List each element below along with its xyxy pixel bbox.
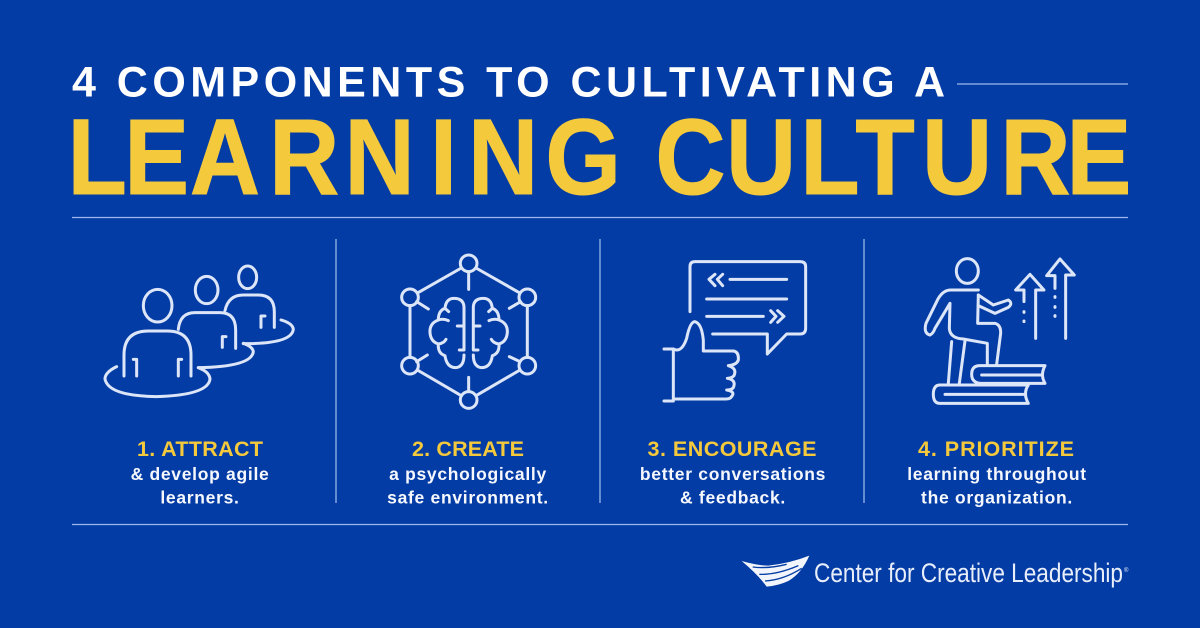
icon: person climbing books with arrows: [925, 259, 1074, 403]
text: encourage description: better conversations: [640, 464, 826, 484]
text: attract description: learners.: [160, 488, 240, 508]
heading: prioritize: 4. PRIORITIZE: [918, 437, 1074, 461]
text: attract description: & develop agile: [131, 464, 269, 484]
title line 2: LEARNING CULTURE: [68, 96, 1131, 217]
panel: encourage: [640, 262, 826, 508]
text: prioritize description: learning throughout: [907, 464, 1087, 484]
title line 1: 4 COMPONENTS TO CULTIVATING A: [72, 58, 945, 106]
text: encourage description: & feedback.: [680, 488, 786, 508]
text: create description: safe environment.: [387, 488, 549, 508]
icon: brain in hexagon network: [402, 255, 536, 408]
icon: three people: [105, 266, 293, 397]
heading: encourage: 3. ENCOURAGE: [648, 437, 816, 461]
icon: thumbs up and speech bubble: [664, 262, 806, 401]
text: create description: a psychologically: [389, 464, 547, 484]
registered mark: ®: [1124, 567, 1129, 574]
heading: attract: 1. ATTRACT: [137, 437, 263, 461]
panel: create: [387, 255, 549, 508]
icon: swoosh logo: [742, 556, 809, 587]
logo: Center for Creative Leadership: [742, 556, 1129, 588]
panel: attract: [105, 266, 293, 508]
heading: create: 2. CREATE: [412, 437, 524, 461]
panel: prioritize: [907, 259, 1087, 508]
wordmark: Center for Creative Leadership: [814, 558, 1123, 588]
text: prioritize description: the organization.: [921, 488, 1073, 508]
